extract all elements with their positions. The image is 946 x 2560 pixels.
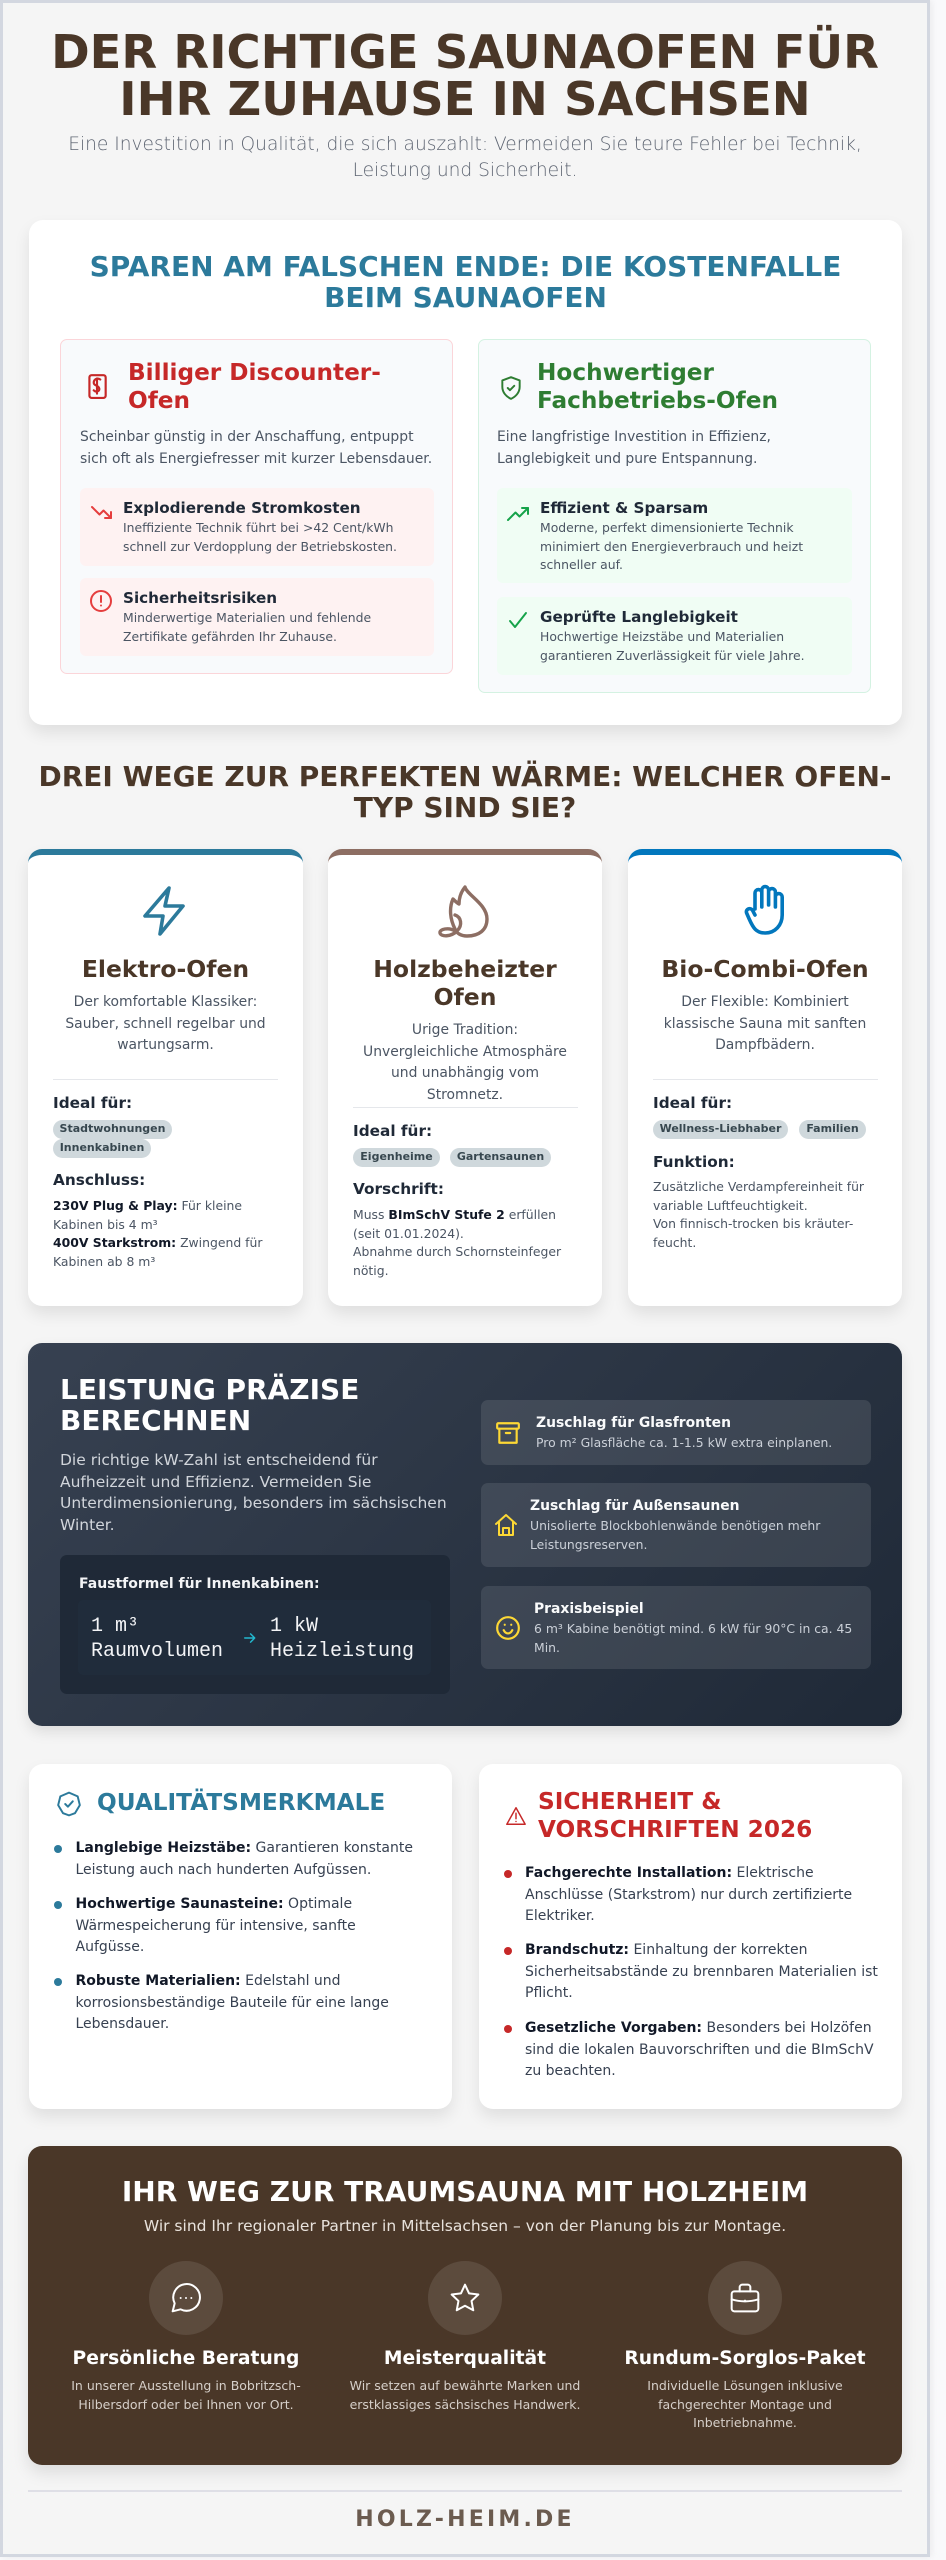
- item: practical example: [481, 1586, 871, 1669]
- list text: Langlebige Heizstäbe: Garantieren konstante: [76, 1840, 413, 1856]
- regulation text: (seit 01.01.2024).: [353, 1226, 464, 1241]
- title: DER RICHTIGE SAUNAOFEN FÜR: [51, 25, 879, 79]
- icon: alert circle: [90, 590, 112, 612]
- item text: Zertifikate gefährden Ihr Zuhause.: [123, 629, 337, 644]
- bullet: [54, 1978, 62, 1986]
- formula right: [270, 1615, 414, 1663]
- description: [497, 429, 771, 467]
- title: [51, 24, 879, 126]
- heading: [537, 359, 778, 414]
- feature text: Individuelle Lösungen inklusive: [647, 2378, 843, 2393]
- function text: Zusätzliche Verdampfereinheit für: [653, 1179, 864, 1194]
- tag: Wellness-Liebhaber: [660, 1122, 781, 1135]
- panel heading: [60, 1373, 359, 1437]
- tag: [353, 1148, 440, 1167]
- card text: [363, 1022, 567, 1103]
- feature title: Rundum-Sorglos-Paket: [624, 2348, 866, 2369]
- item text: Minderwertige Materialien und fehlende: [123, 610, 371, 625]
- feature text: Inbetriebnahme.: [693, 2415, 797, 2430]
- item text: schneller auf.: [540, 557, 623, 572]
- formula box: [60, 1555, 450, 1694]
- panel text: Unterdimensionierung, besonders im sächsischen: [60, 1494, 447, 1512]
- card: electric oven: [28, 849, 303, 1306]
- list text: sind die lokalen Bauvorschriften und die BImSchV: [525, 2042, 874, 2058]
- formula title: Faustformel für Innenkabinen:: [79, 1576, 320, 1592]
- heading: Hochwertiger: [537, 359, 714, 386]
- arrow: [244, 1633, 256, 1643]
- list text: Lebensdauer.: [76, 2016, 169, 2032]
- card text: und unabhängig vom: [391, 1065, 539, 1081]
- item text: [540, 520, 803, 572]
- card text: Der komfortable Klassiker:: [74, 994, 257, 1010]
- feature text: erstklassiges sächsisches Handwerk.: [350, 2397, 580, 2412]
- formula left: 1 m³: [91, 1615, 139, 1638]
- regulation text: [353, 1207, 562, 1278]
- tag: [653, 1120, 788, 1139]
- panel text: Winter.: [60, 1516, 115, 1534]
- card text: klassische Sauna mit sanften: [664, 1016, 866, 1032]
- item: glass fronts: [481, 1400, 871, 1465]
- item text: Moderne, perfekt dimensionierte Technik: [540, 520, 794, 535]
- description: Scheinbar günstig in der Anschaffung, entpuppt: [80, 429, 414, 445]
- card text: Stromnetz.: [427, 1087, 503, 1103]
- description: Eine langfristige Investition in Effizienz,: [497, 429, 771, 445]
- list text: [76, 1894, 356, 1959]
- subtitle: Leistung und Sicherheit.: [353, 160, 577, 181]
- panel heading: [538, 1788, 812, 1843]
- icon: badge check: [57, 1792, 81, 1816]
- label: Ideal für:: [53, 1094, 132, 1112]
- list text: zu beachten.: [525, 2063, 616, 2079]
- item text: [530, 1518, 820, 1552]
- footer brand: HOLZ-HEIM.DE: [355, 2507, 575, 2532]
- panel subtitle: Wir sind Ihr regionaler Partner in Mittelsachsen – von der Planung bis zur Montage.: [144, 2217, 786, 2235]
- feature text: In unserer Ausstellung in Bobritzsch-: [71, 2378, 301, 2393]
- heading: [128, 359, 381, 414]
- card title: Elektro-Ofen: [82, 955, 249, 983]
- feature text: fachgerechter Montage und: [658, 2397, 832, 2412]
- item title: Praxisbeispiel: [534, 1601, 644, 1617]
- item: tested durability: [497, 597, 852, 675]
- label: Funktion:: [653, 1153, 735, 1171]
- formula right: 1 kW: [270, 1615, 318, 1638]
- bullet: [504, 1947, 512, 1955]
- description: sich oft als Energiefresser mit kurzer Lebensdauer.: [80, 451, 432, 467]
- panel heading: VORSCHRIFTEN 2026: [538, 1816, 812, 1842]
- list text: [525, 2018, 874, 2083]
- formula right: Heizleistung: [270, 1640, 414, 1663]
- card text: Der Flexible: Kombiniert: [681, 994, 849, 1010]
- panel heading: QUALITÄTSMERKMALE: [97, 1789, 385, 1816]
- function text: variable Luftfeuchtigkeit.: [653, 1198, 808, 1213]
- heading: Fachbetriebs-Ofen: [537, 386, 778, 414]
- item title: Sicherheitsrisiken: [123, 589, 277, 607]
- formula left: Raumvolumen: [91, 1640, 223, 1663]
- footer line: [28, 2490, 902, 2492]
- connection text: [53, 1198, 262, 1269]
- tag: Innenkabinen: [60, 1141, 144, 1154]
- panel heading: [90, 250, 841, 314]
- subtitle: Eine Investition in Qualität, die sich auszahlt: Vermeiden Sie teure Fehler bei Technik,: [68, 134, 862, 155]
- list text: Gesetzliche Vorgaben: Besonders bei Holzöfen: [525, 2020, 872, 2036]
- item text: Ineffiziente Technik führt bei >42 Cent/kWh: [123, 520, 393, 535]
- panel heading: IHR WEG ZUR TRAUMSAUNA MIT HOLZHEIM: [122, 2175, 808, 2208]
- item title: Zuschlag für Außensaunen: [530, 1498, 740, 1514]
- list text: Robuste Materialien: Edelstahl und: [76, 1973, 341, 1989]
- feature title: Persönliche Beratung: [73, 2348, 299, 2369]
- card: wood oven: [328, 849, 602, 1306]
- label: Ideal für:: [353, 1122, 432, 1140]
- feature title: Meisterqualität: [384, 2348, 546, 2369]
- panel heading: BERECHNEN: [60, 1404, 251, 1437]
- list text: Hochwertige Saunasteine: Optimale: [76, 1896, 352, 1912]
- item: safety risks: [80, 578, 434, 656]
- card text: [65, 994, 266, 1053]
- list text: Aufgüsse.: [76, 1939, 144, 1955]
- list text: Leistung auch nach hunderten Aufgüssen.: [76, 1862, 371, 1878]
- panel: quality features: [29, 1764, 452, 2109]
- item title: Geprüfte Langlebigkeit: [540, 608, 738, 626]
- feature text: Wir setzen auf bewährte Marken und: [350, 2378, 580, 2393]
- item text: 6 m³ Kabine benötigt mind. 6 kW für 90°C in ca. 45: [534, 1621, 852, 1636]
- formula body: [78, 1600, 431, 1675]
- icon: lightning: [143, 886, 185, 936]
- circle icon: briefcase: [708, 2261, 782, 2335]
- regulation text: Abnahme durch Schornsteinfeger: [353, 1244, 561, 1259]
- list text: [76, 1840, 413, 1878]
- list text: Wärmespeicherung für intensive, sanfte: [76, 1918, 356, 1934]
- divider: [53, 1079, 278, 1080]
- panel text: Die richtige kW-Zahl ist entscheidend für: [60, 1451, 378, 1469]
- item text: Hochwertige Heizstäbe und Materialien: [540, 629, 784, 644]
- feature text: [307, 2377, 623, 2414]
- label: Ideal für:: [653, 1094, 732, 1112]
- function text: feucht.: [653, 1235, 696, 1250]
- label: Anschluss:: [53, 1171, 145, 1189]
- connection text: 400V Starkstrom: Zwingend für: [53, 1235, 262, 1250]
- panel: safety and regulations: [479, 1764, 902, 2109]
- panel text: Aufheizzeit und Effizienz. Vermeiden Sie: [60, 1473, 371, 1491]
- item text: [540, 629, 805, 663]
- item: efficient: [497, 488, 852, 583]
- card title: Holzbeheizter: [373, 955, 557, 983]
- item text: Unisolierte Blockbohlenwände benötigen mehr: [530, 1518, 820, 1533]
- section heading: oven types: TYP SIND SIE?: [354, 791, 576, 824]
- divider: [653, 1079, 878, 1080]
- list text: Elektriker.: [525, 1908, 595, 1924]
- icon: house: [495, 1514, 517, 1536]
- item text: Min.: [534, 1640, 560, 1655]
- subtitle: [68, 134, 862, 181]
- panel: discounter oven: [60, 339, 453, 674]
- description: [80, 429, 432, 467]
- card text: Dampfbädern.: [715, 1037, 815, 1053]
- panel: quality oven: [478, 339, 871, 693]
- item text: [123, 610, 371, 644]
- section heading: oven types: DREI WEGE ZUR PERFEKTEN WÄRME: WELCHER OFEN-: [38, 760, 892, 793]
- icon: smile: [496, 1616, 520, 1640]
- heading: Billiger Discounter-: [128, 359, 381, 386]
- connection text: Kabinen bis 4 m³: [53, 1217, 158, 1232]
- circle icon: star: [428, 2261, 502, 2335]
- tag: [450, 1148, 551, 1167]
- list text: Fachgerechte Installation: Elektrische: [525, 1865, 814, 1881]
- card title: Bio-Combi-Ofen: [661, 955, 869, 983]
- panel text: [60, 1451, 447, 1534]
- label: Vorschrift:: [353, 1180, 444, 1198]
- icon: trend up: [506, 507, 529, 521]
- icon: trend down: [91, 506, 112, 519]
- bullet: [504, 1870, 512, 1878]
- card: bio combi oven: [628, 849, 902, 1306]
- item: electricity costs: [80, 488, 434, 566]
- item text: minimiert den Energieverbrauch und heizt: [540, 539, 803, 554]
- tag: [799, 1120, 866, 1139]
- title: IHR ZUHAUSE IN SACHSEN: [119, 72, 811, 126]
- tag: Eigenheime: [360, 1150, 433, 1163]
- feature text: [28, 2377, 344, 2414]
- card text: Sauber, schnell regelbar und: [65, 1016, 266, 1032]
- bullet: [54, 1845, 62, 1853]
- regulation text: nötig.: [353, 1263, 389, 1278]
- item text: garantieren Zuverlässigkeit für viele Jahre.: [540, 648, 805, 663]
- circle icon: chat: [149, 2261, 223, 2335]
- tag: Familien: [806, 1122, 859, 1135]
- list text: Anschlüsse (Starkstrom) nur durch zertifizierte: [525, 1887, 852, 1903]
- feature text: Hilbersdorf oder bei Ihnen vor Ort.: [78, 2397, 294, 2412]
- card text: Urige Tradition:: [412, 1022, 518, 1038]
- list text: korrosionsbeständige Bauteile für eine lange: [76, 1995, 389, 2011]
- panel: call to action: [28, 2146, 902, 2465]
- item text: Leistungsreserven.: [530, 1537, 647, 1552]
- icon: banknote warning: [88, 374, 107, 399]
- card text: [664, 994, 866, 1053]
- list text: [76, 1971, 389, 2036]
- function text: Von finnisch-trocken bis kräuter-: [653, 1216, 853, 1231]
- description: Langlebigkeit und pure Entspannung.: [497, 451, 757, 467]
- panel: cost trap: [29, 220, 902, 725]
- card text: Unvergleichliche Atmosphäre: [363, 1044, 567, 1060]
- icon: check: [509, 612, 527, 628]
- regulation text: Muss BImSchV Stufe 2 erfüllen: [353, 1207, 556, 1222]
- card text: wartungsarm.: [117, 1037, 214, 1053]
- icon: warning triangle: [505, 1805, 527, 1827]
- panel heading: LEISTUNG PRÄZISE: [60, 1373, 359, 1406]
- section heading: oven types: [38, 760, 892, 824]
- panel heading: SICHERHEIT &: [538, 1788, 721, 1815]
- divider: [353, 1107, 578, 1108]
- list text: Brandschutz: Einhaltung der korrekten: [525, 1942, 808, 1958]
- item title: Zuschlag für Glasfronten: [536, 1415, 731, 1431]
- item: outdoor saunas: [481, 1483, 871, 1567]
- connection text: Kabinen ab 8 m³: [53, 1254, 155, 1269]
- tag: [53, 1120, 172, 1139]
- function text: [653, 1179, 864, 1250]
- connection text: 230V Plug & Play: Für kleine: [53, 1198, 242, 1213]
- icon: shield check: [501, 376, 521, 400]
- item text: [534, 1621, 852, 1655]
- card title: [373, 955, 557, 1011]
- tag: [53, 1139, 151, 1158]
- list text: [525, 1863, 852, 1928]
- panel heading: BEIM SAUNAOFEN: [324, 281, 607, 314]
- panel heading: SPAREN AM FALSCHEN ENDE: DIE KOSTENFALLE: [90, 250, 841, 283]
- tag: Gartensaunen: [457, 1150, 544, 1163]
- item text: Pro m² Glasfläche ca. 1-1.5 kW extra einplanen.: [536, 1435, 832, 1450]
- tag: Stadtwohnungen: [60, 1122, 165, 1135]
- panel: power calculation: [28, 1343, 902, 1726]
- heading: Ofen: [128, 386, 190, 414]
- icon: flame: [438, 885, 489, 938]
- item text: schnell zur Verdopplung der Betriebskosten.: [123, 539, 397, 554]
- icon: hand: [744, 884, 784, 935]
- item text: [123, 520, 397, 554]
- formula left: [91, 1615, 223, 1663]
- card title: Ofen: [434, 983, 496, 1011]
- icon: box: [496, 1422, 520, 1444]
- list text: Sicherheitsabstände zu brennbaren Materialien ist: [525, 1964, 878, 1980]
- bullet: [54, 1901, 62, 1909]
- list text: Pflicht.: [525, 1985, 573, 2001]
- bullet: [504, 2025, 512, 2033]
- list text: [525, 1940, 878, 2005]
- feature text: [587, 2377, 903, 2433]
- item title: Explodierende Stromkosten: [123, 499, 361, 517]
- item title: Effizient & Sparsam: [540, 499, 708, 517]
